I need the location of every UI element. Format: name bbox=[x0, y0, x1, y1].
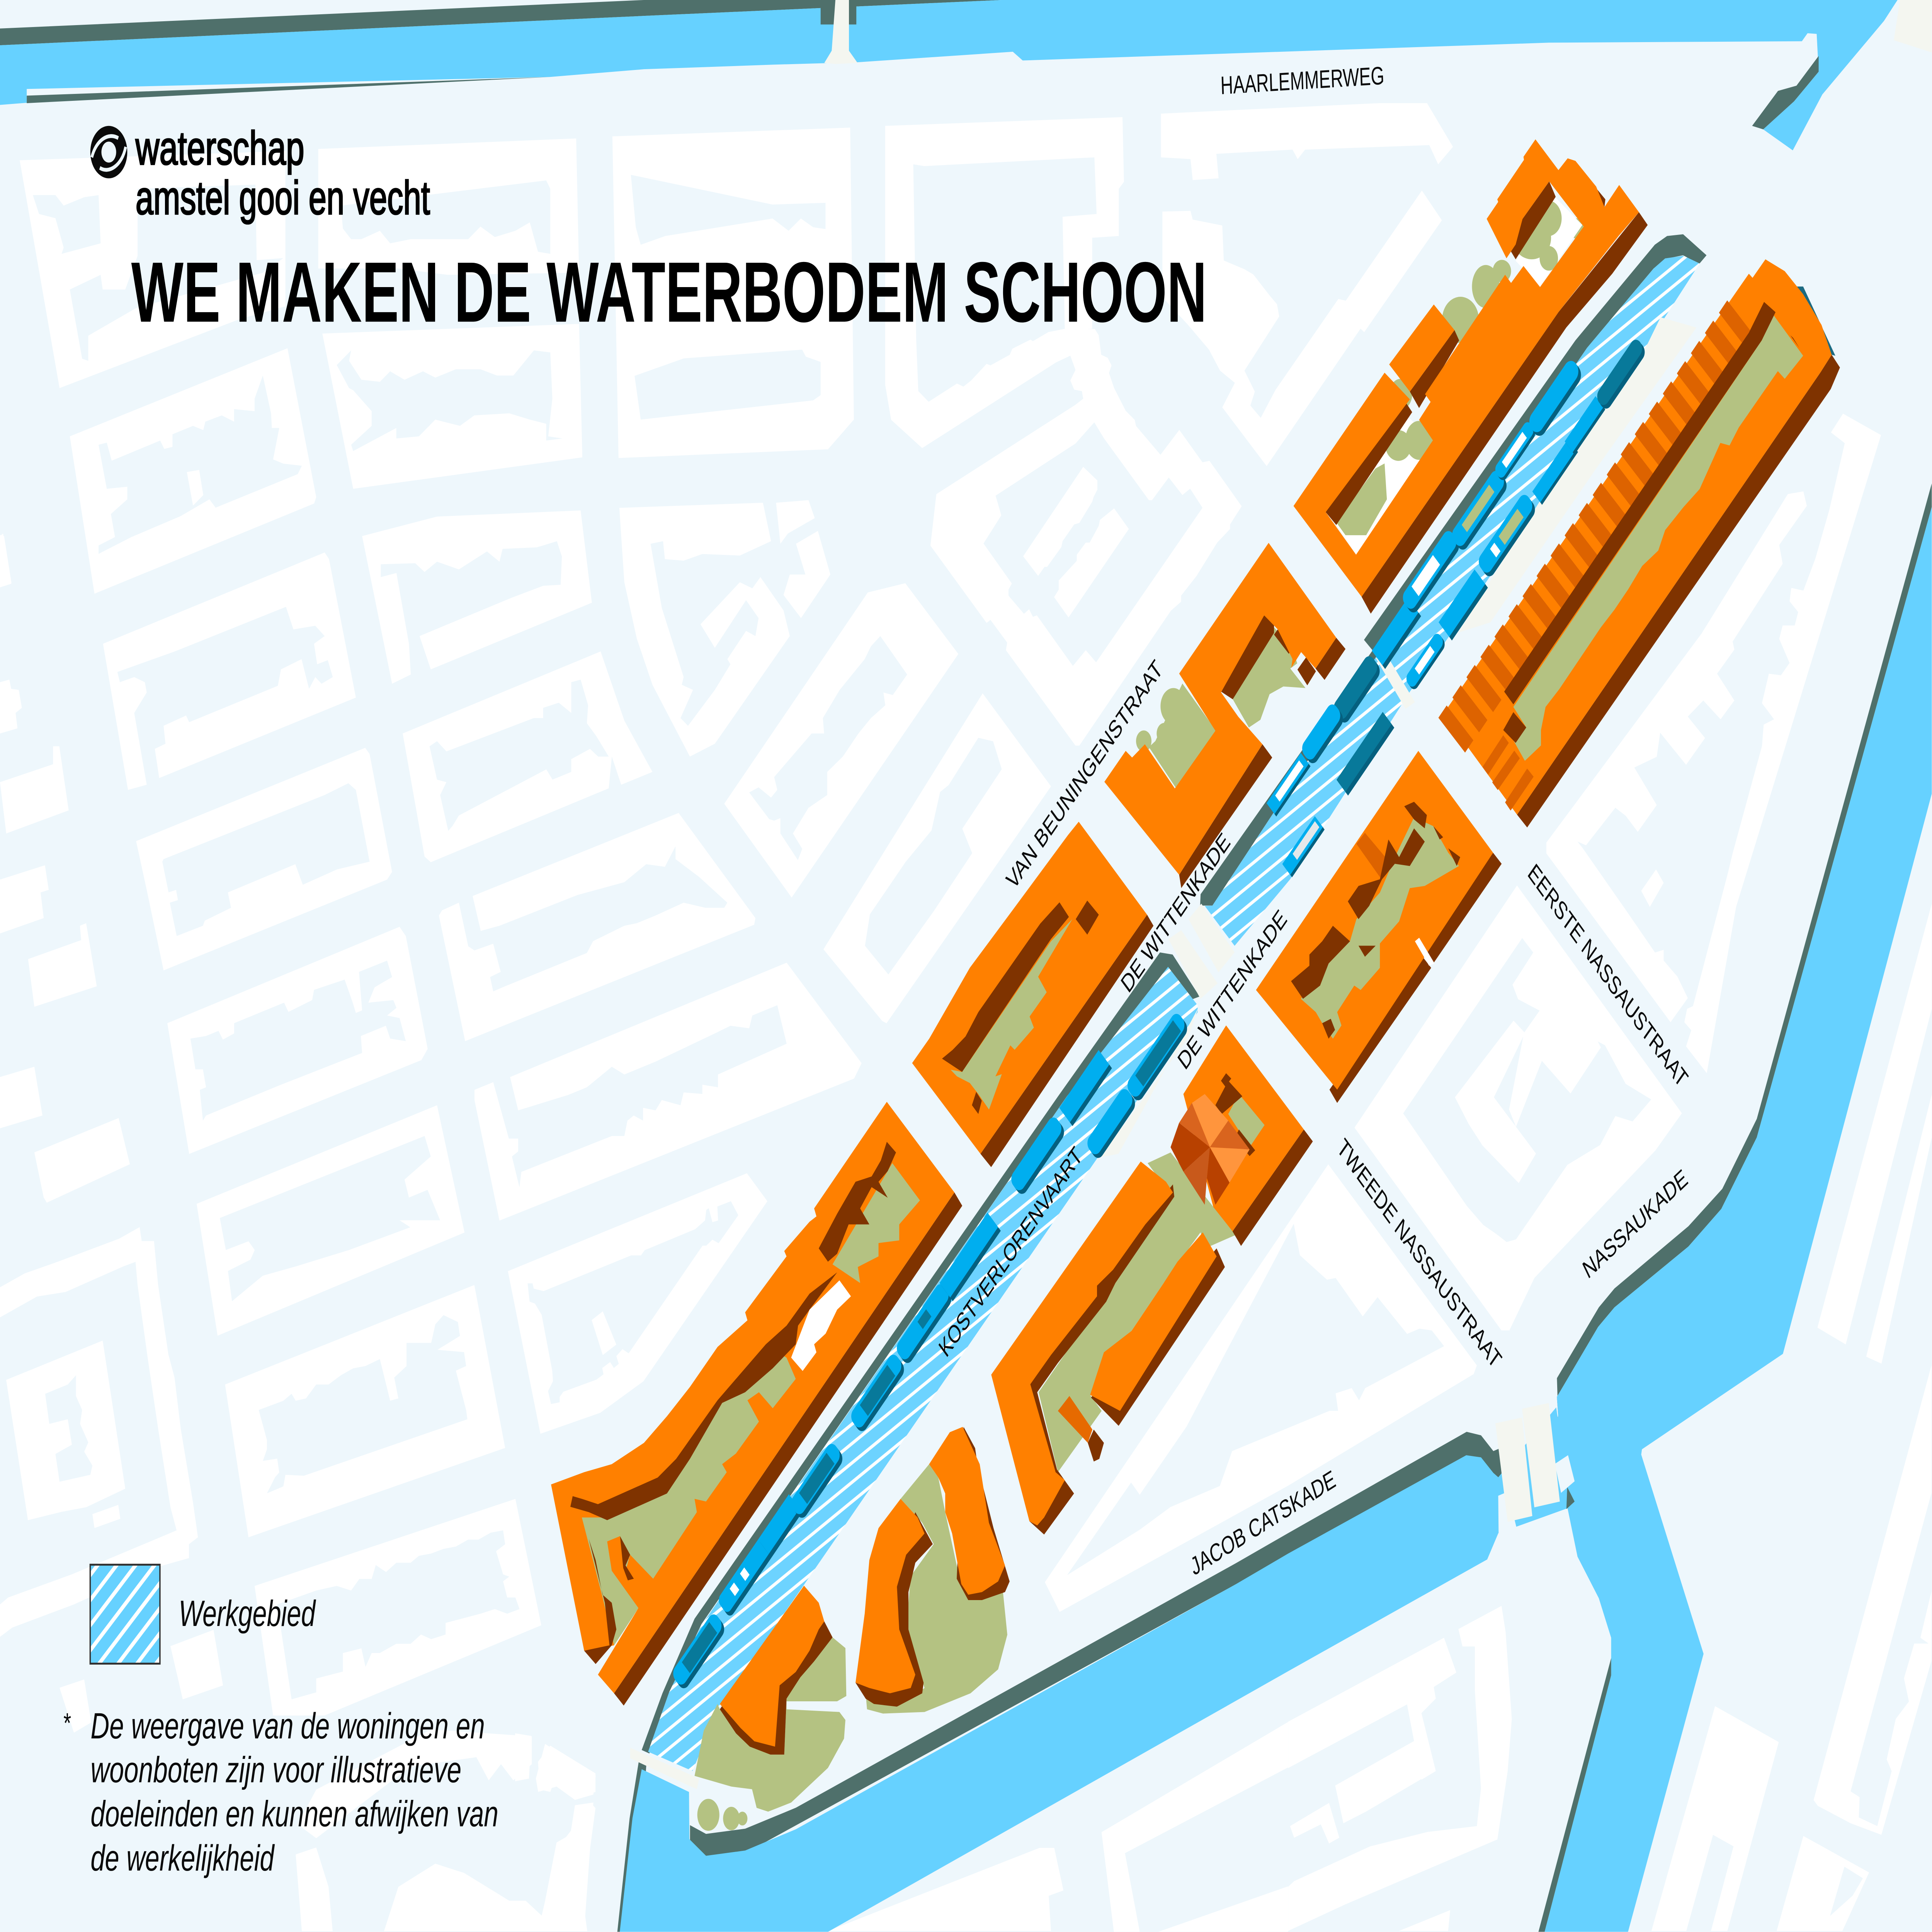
boat 24 bbox=[1526, 357, 1584, 440]
label: Tweede Nassaustraat: TWEEDE NASSAUSTRAAT bbox=[1333, 1134, 1505, 1374]
boat 8 bbox=[1009, 1114, 1066, 1197]
boat 9 bbox=[1059, 1050, 1112, 1126]
boat 6 bbox=[894, 1281, 954, 1367]
street labels bbox=[935, 62, 1692, 1581]
block: Van Beuningenstraat south bbox=[912, 822, 1153, 1167]
boat 18 bbox=[1400, 527, 1462, 616]
label: Haarlemmerweg: HAARLEMMERWEG bbox=[1220, 62, 1385, 100]
boat 15 bbox=[1337, 712, 1394, 796]
legend label: Werkgebied bbox=[179, 1593, 316, 1634]
footnote line 4: de werkelijkheid bbox=[90, 1838, 275, 1879]
boat 10 bbox=[1085, 1085, 1138, 1162]
boat 5 bbox=[849, 1351, 906, 1435]
building near park bbox=[720, 1586, 833, 1755]
title: WE MAKEN DE WATERBODEM SCHOON bbox=[131, 244, 1207, 340]
boat 16 bbox=[1282, 816, 1325, 878]
water: top canal bbox=[0, 0, 1932, 150]
label: Jacob Catskade: JACOB CATSKADE bbox=[1187, 1465, 1338, 1581]
water: lower canal Jacob Catskade bbox=[617, 1407, 1571, 1932]
boat 19 bbox=[1405, 631, 1447, 692]
boat 1 bbox=[671, 1611, 727, 1692]
water: right canal bbox=[1539, 483, 1932, 1932]
trees bbox=[1136, 684, 1216, 788]
boat 12 bbox=[1331, 653, 1382, 726]
label: De Wittenkade south: DE WITTENKADE bbox=[1174, 905, 1291, 1075]
boat 2 bbox=[717, 1535, 775, 1619]
block: long right block with striped roofs bbox=[1439, 259, 1840, 828]
boat 11 bbox=[1125, 1010, 1190, 1104]
courtyard green bbox=[1233, 628, 1306, 728]
block: top right with courtyards bbox=[1294, 139, 1648, 614]
boat 27 bbox=[1595, 336, 1647, 412]
boat 25 bbox=[1532, 439, 1578, 505]
logo text line 2: amstel gooi en vecht bbox=[136, 172, 430, 224]
beige quays bbox=[630, 317, 1696, 1789]
boat 20 bbox=[1439, 570, 1488, 641]
park bbox=[694, 1637, 846, 1811]
legend: werkgebied bbox=[90, 1565, 316, 1663]
label: Van Beuningenstraat: VAN BEUNINGENSTRAAT bbox=[1002, 655, 1167, 895]
werkgebied: hatched canal area lower bbox=[648, 967, 1197, 1771]
footnote bbox=[63, 1706, 498, 1879]
boat 17 bbox=[1372, 598, 1421, 669]
logo: waterschap amstel gooi en vecht bbox=[90, 122, 430, 224]
courtyard bbox=[833, 1163, 920, 1283]
label: Kostverlorenvaart: KOSTVERLORENVAART bbox=[935, 1142, 1086, 1362]
boat 22 bbox=[1476, 491, 1537, 580]
boat 3 bbox=[758, 1494, 802, 1558]
canal dark quay wall bbox=[642, 234, 1706, 1753]
boat 7 bbox=[939, 1213, 1001, 1301]
logo text line 1: waterschap bbox=[135, 122, 304, 175]
park and buildings south bbox=[694, 1153, 1235, 1831]
block: church with hipped roof bbox=[1170, 1026, 1313, 1246]
trees bbox=[1389, 201, 1584, 410]
Tweede Nassaustraat courtyard bbox=[1039, 1153, 1235, 1472]
legend swatch bbox=[90, 1565, 160, 1663]
block: Kostverlorenkade long west block bbox=[551, 1102, 962, 1706]
boat 26 bbox=[1565, 396, 1605, 455]
boat 23 bbox=[1493, 419, 1537, 483]
icon: swirl bbox=[90, 126, 127, 178]
boat 4 bbox=[789, 1440, 845, 1521]
footnote line 2: woonboten zijn voor illustratieve bbox=[90, 1750, 461, 1791]
woonboten bbox=[671, 336, 1647, 1692]
curved buildings bbox=[957, 1427, 1010, 1600]
roof stripes bbox=[1439, 300, 1754, 811]
roof bbox=[1170, 1094, 1250, 1205]
label: Eerste Nassaustraat: EERSTE NASSAUSTRAAT bbox=[1524, 859, 1692, 1093]
boat 13 bbox=[1299, 701, 1345, 767]
green courtyard bbox=[866, 1464, 1007, 1714]
trees on quay tip bbox=[697, 1799, 747, 1831]
block: Van Beuningenstraat north bbox=[1104, 543, 1345, 888]
label: Nassaukade: NASSAUKADE bbox=[1579, 1164, 1691, 1284]
footnote line 1: De weergave van de woningen en bbox=[90, 1706, 485, 1747]
label: De Wittenkade north: DE WITTENKADE bbox=[1117, 828, 1234, 998]
footnote line 3: doeleinden en kunnen afwijken van bbox=[90, 1794, 498, 1834]
asterisk: * bbox=[63, 1708, 71, 1739]
werkgebied: hatched canal area upper bbox=[1205, 256, 1700, 946]
boat 21 bbox=[1450, 467, 1509, 553]
bridge: Nassaukade bbox=[1495, 1403, 1575, 1536]
block: De Wittenkade south-east bbox=[1256, 751, 1502, 1103]
boat 14 bbox=[1267, 753, 1311, 816]
